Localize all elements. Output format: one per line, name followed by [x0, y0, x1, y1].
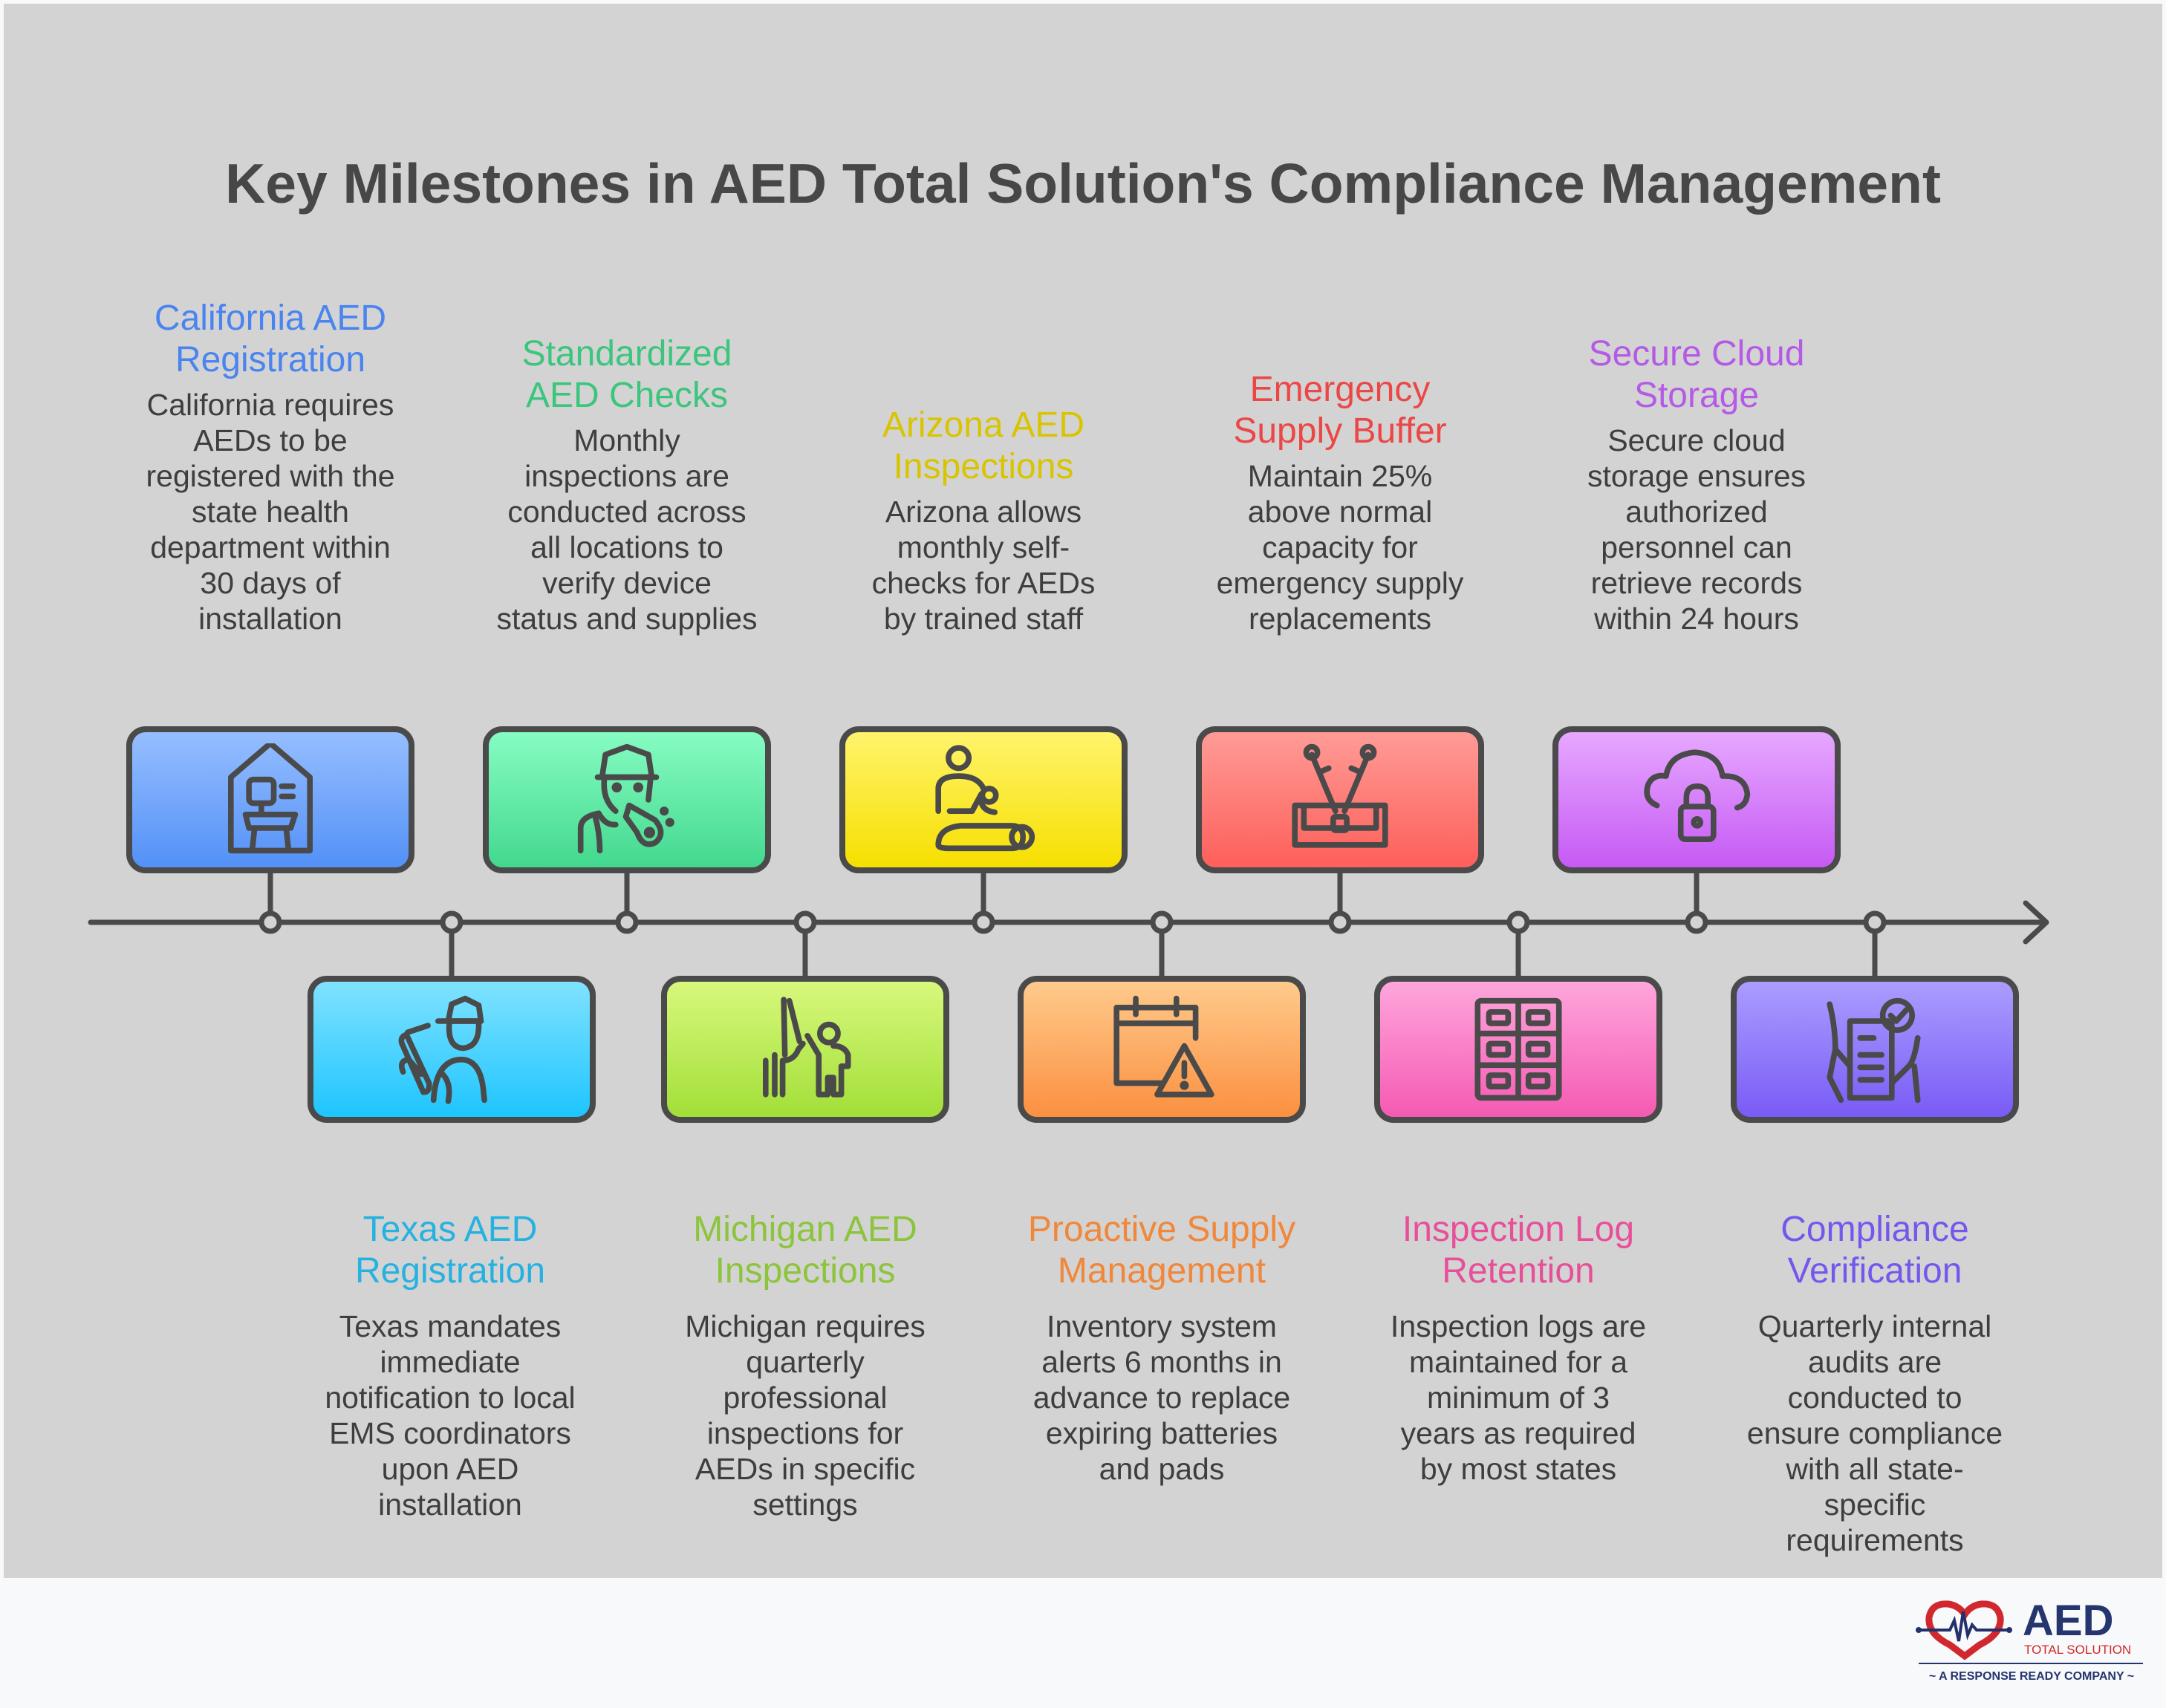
- text: texas: Registration: [355, 1251, 545, 1291]
- text: inspection log: [1391, 1210, 1646, 1486]
- text: emergency: above normal: [1248, 495, 1432, 529]
- text: compliance: Verification: [1788, 1251, 1962, 1291]
- text: compliance: conducted to: [1788, 1381, 1962, 1415]
- text: california: department within: [150, 530, 391, 564]
- text: arizona: [872, 405, 1095, 636]
- text: michigan: inspections for: [707, 1416, 903, 1450]
- text: texas: installation: [378, 1487, 522, 1522]
- text: inspection log: maintained for a: [1409, 1345, 1627, 1379]
- text: proactive: alerts 6 months in: [1041, 1345, 1282, 1379]
- text: michigan: professional: [723, 1381, 888, 1415]
- box: standardized icon: [483, 726, 771, 873]
- text: inspection log: by most states: [1420, 1452, 1616, 1486]
- text: emergency: emergency supply: [1217, 566, 1463, 600]
- text: emergency: replacements: [1249, 602, 1431, 636]
- text: inspection log: Inspection Log: [1402, 1210, 1634, 1249]
- text: inspection log: Inspection logs are: [1391, 1309, 1646, 1343]
- text: proactive: Inventory system: [1047, 1309, 1277, 1343]
- logo: AED: [2023, 1597, 2113, 1645]
- text: arizona: Inspections: [894, 447, 1073, 486]
- box: texas icon: [308, 976, 596, 1123]
- text: michigan: Inspections: [715, 1251, 895, 1291]
- text: texas: [325, 1210, 576, 1522]
- text: secure cloud: Secure Cloud: [1589, 334, 1804, 374]
- text: california: 30 days of: [200, 566, 341, 600]
- text: compliance: Quarterly internal: [1758, 1309, 1991, 1343]
- text: michigan: Michigan AED: [693, 1210, 917, 1249]
- box: cloud icon: [1552, 726, 1841, 873]
- box: emergency icon: [1196, 726, 1484, 873]
- text: emergency: Maintain 25%: [1248, 459, 1432, 493]
- text: inspection log: minimum of 3: [1427, 1381, 1610, 1415]
- text: proactive: and pads: [1099, 1452, 1224, 1486]
- text: standardized: conducted across: [507, 495, 747, 529]
- text: secure cloud: retrieve records: [1591, 566, 1802, 600]
- text: california: registered with the: [146, 459, 395, 493]
- text: compliance: audits are: [1808, 1345, 1942, 1379]
- text: california: California requires: [147, 388, 394, 422]
- text: michigan: [685, 1210, 926, 1522]
- box: michigan icon: [661, 976, 949, 1123]
- text: standardized: AED Checks: [526, 376, 728, 415]
- text: secure cloud: Storage: [1634, 376, 1759, 415]
- box: compliance icon: [1731, 976, 2019, 1123]
- text: emergency: Supply Buffer: [1233, 411, 1447, 451]
- text: arizona: checks for AEDs: [872, 566, 1095, 600]
- text: standardized: status and supplies: [496, 602, 758, 636]
- text: standardized: verify device: [542, 566, 712, 600]
- box: california icon: [126, 726, 414, 873]
- title: Key Milestones in AED Total Solution's Compliance Management: [225, 152, 1941, 215]
- text: inspection log: Retention: [1442, 1251, 1595, 1291]
- text: compliance: [1747, 1210, 2003, 1557]
- text: california: California AED: [155, 299, 386, 338]
- text: proactive: Management: [1058, 1251, 1266, 1291]
- text: arizona: monthly self-: [897, 530, 1070, 564]
- text: inspection log: years as required: [1401, 1416, 1636, 1450]
- text: secure cloud: authorized: [1625, 495, 1768, 529]
- text: secure cloud: storage ensures: [1587, 459, 1806, 493]
- text: standardized: inspections are: [524, 459, 729, 493]
- text: arizona: by trained staff: [884, 602, 1083, 636]
- box: inspection log icon: [1374, 976, 1662, 1123]
- text: compliance: specific: [1824, 1487, 1925, 1522]
- logo: TOTAL SOLUTION: [2024, 1643, 2131, 1657]
- text: standardized: Standardized: [522, 334, 732, 374]
- text: secure cloud: Secure cloud: [1607, 423, 1786, 457]
- text: compliance: Compliance: [1780, 1210, 1969, 1249]
- text: michigan: quarterly: [746, 1345, 865, 1379]
- text: texas: notification to local: [325, 1381, 576, 1415]
- text: compliance: requirements: [1786, 1523, 1964, 1557]
- box: arizona icon: [839, 726, 1128, 873]
- logo: ~ A RESPONSE READY COMPANY ~: [1929, 1670, 2134, 1683]
- text: proactive: advance to replace: [1033, 1381, 1290, 1415]
- text: standardized: all locations to: [530, 530, 723, 564]
- text: emergency: Emergency: [1250, 370, 1430, 409]
- text: michigan: settings: [752, 1487, 858, 1522]
- text: arizona: Arizona AED: [882, 405, 1084, 445]
- text: secure cloud: within 24 hours: [1594, 602, 1799, 636]
- text: california: AEDs to be: [193, 423, 348, 457]
- logo: [1916, 1597, 2143, 1683]
- text: emergency: capacity for: [1262, 530, 1418, 564]
- text: standardized: [496, 334, 758, 636]
- text: texas: Texas AED: [363, 1210, 537, 1249]
- text: california: Registration: [175, 340, 365, 379]
- text: texas: upon AED: [382, 1452, 518, 1486]
- text: california: state health: [192, 495, 349, 529]
- text: emergency: [1217, 370, 1463, 636]
- text: secure cloud: [1587, 334, 1806, 636]
- text: proactive: [1028, 1210, 1295, 1486]
- text: texas: EMS coordinators: [329, 1416, 571, 1450]
- text: arizona: Arizona allows: [885, 495, 1082, 529]
- text: secure cloud: personnel can: [1601, 530, 1792, 564]
- box: proactive icon: [1018, 976, 1306, 1123]
- text: california: [146, 299, 395, 636]
- text: california: installation: [198, 602, 342, 636]
- text: michigan: AEDs in specific: [695, 1452, 915, 1486]
- text: compliance: ensure compliance: [1747, 1416, 2003, 1450]
- text: texas: immediate: [380, 1345, 521, 1379]
- text: texas: Texas mandates: [339, 1309, 561, 1343]
- text: compliance: with all state-: [1786, 1452, 1964, 1486]
- text: standardized: Monthly: [573, 423, 680, 457]
- text: proactive: expiring batteries: [1046, 1416, 1278, 1450]
- text: proactive: Proactive Supply: [1028, 1210, 1295, 1249]
- text: michigan: Michigan requires: [685, 1309, 926, 1343]
